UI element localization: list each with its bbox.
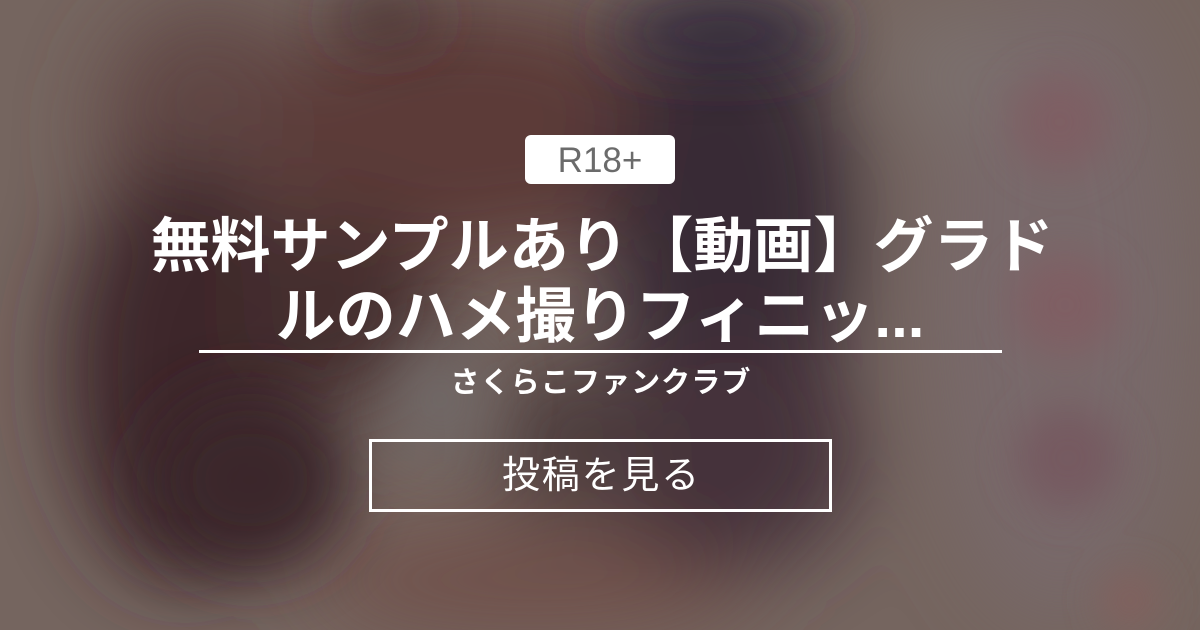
title xyxy=(151,213,1053,350)
R18 badge xyxy=(525,135,675,184)
view posts button xyxy=(369,439,832,512)
view posts button: 投稿を見る xyxy=(502,455,701,497)
title: 無料サンプルあり 【動画】グラド xyxy=(151,213,1053,280)
creator name: さくらこファンクラブ xyxy=(450,367,752,399)
R18 badge: R18+ xyxy=(558,141,642,180)
divider line xyxy=(199,350,1002,353)
title: ルのハメ撮りフィニッ... xyxy=(276,283,924,350)
